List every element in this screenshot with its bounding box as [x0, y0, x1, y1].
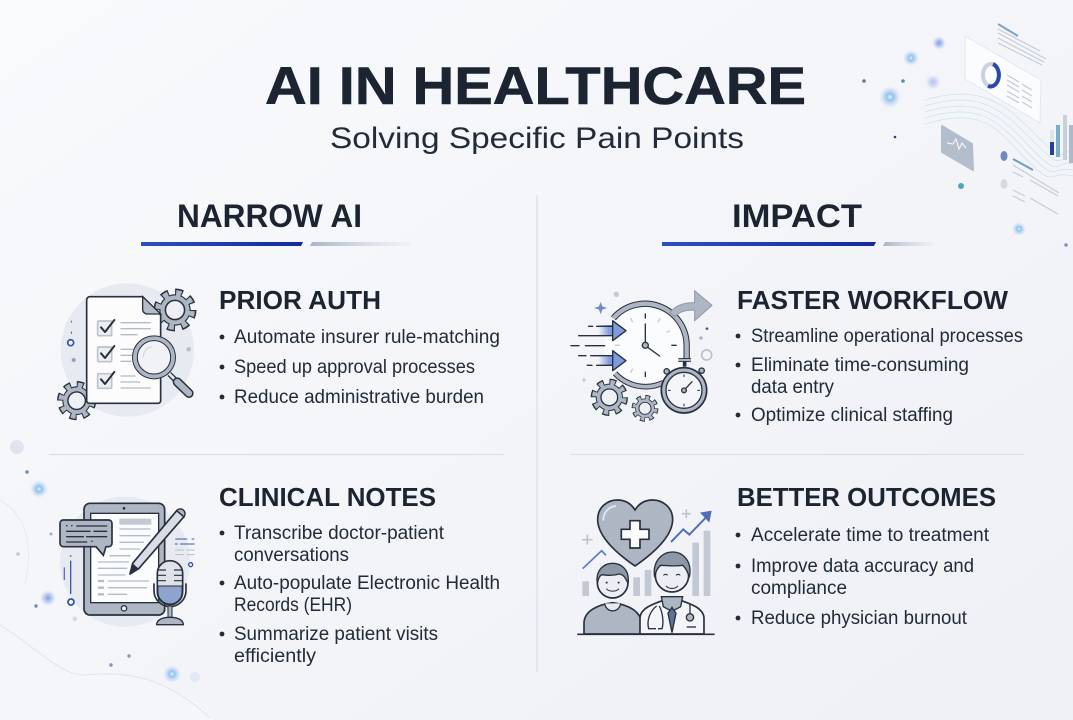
- list: better outcomes: Accelerate time to treatment: [751, 525, 990, 546]
- right divider: [570, 454, 1024, 456]
- list: prior auth: Reduce administrative burden: [234, 387, 484, 408]
- list: clinical notes: Summarize patient visits: [234, 624, 438, 645]
- bar set: [1050, 115, 1073, 163]
- panel: faster workflow: [571, 285, 1023, 426]
- list: prior auth: Automate insurer rule-matching: [234, 327, 500, 348]
- panel: prior auth: [61, 283, 500, 417]
- panel: clinical notes: [60, 482, 500, 667]
- decorative wave and dots: bottom left: [0, 440, 215, 720]
- heading: prior auth: PRIOR AUTH: [219, 285, 381, 315]
- list: clinical notes: conversations: [234, 545, 349, 566]
- list: clinical notes: efficiently: [234, 646, 317, 667]
- decorative network: top right: [862, 24, 1073, 247]
- data lines bottom: [1000, 151, 1059, 214]
- column divider: [536, 195, 538, 672]
- list: prior auth: [220, 327, 500, 408]
- wave lines: [925, 94, 1073, 177]
- panel: better outcomes: [577, 482, 996, 634]
- list: faster workflow: Eliminate time-consuming: [751, 355, 969, 376]
- icon: checklist with magnifier: [61, 283, 194, 417]
- heading: Narrow AI: [141, 198, 411, 246]
- icon: heart, patient, doctor and rising chart: [577, 500, 715, 634]
- heading: clinical notes: CLINICAL NOTES: [219, 482, 436, 512]
- heading: Narrow AI: NARROW AI: [177, 198, 362, 234]
- pulse card: [942, 126, 973, 170]
- subtitle: Solving Specific Pain Points: [330, 122, 744, 155]
- list: faster workflow: Optimize clinical staffing: [751, 405, 953, 426]
- heading: faster workflow: FASTER WORKFLOW: [737, 285, 1008, 315]
- list: better outcomes: compliance: [751, 578, 847, 599]
- glow dots: [879, 86, 901, 108]
- heading: Impact: IMPACT: [732, 198, 862, 234]
- list: faster workflow: [736, 326, 1023, 426]
- list: better outcomes: Improve data accuracy and: [751, 556, 974, 577]
- list: clinical notes: Auto-populate Electronic Health: [234, 573, 500, 594]
- list: better outcomes: Reduce physician burnout: [751, 608, 968, 629]
- data lines top: [998, 24, 1046, 65]
- left divider: [49, 454, 504, 456]
- list: clinical notes: [220, 523, 500, 667]
- heading: better outcomes: BETTER OUTCOMES: [737, 482, 996, 512]
- list: clinical notes: Records (EHR): [234, 595, 352, 616]
- list: prior auth: Speed up approval processes: [234, 357, 475, 378]
- icon: clock, arrows, stopwatch and gears: [571, 291, 712, 419]
- list: faster workflow: data entry: [751, 377, 834, 398]
- list: clinical notes: Transcribe doctor-patient: [234, 523, 445, 544]
- title: AI IN HEALTHCARE: [265, 57, 806, 116]
- heading: Impact: [662, 198, 933, 246]
- list: better outcomes: [736, 525, 990, 629]
- list: faster workflow: Streamline operational processes: [751, 326, 1023, 347]
- dashboard card: [965, 36, 1041, 123]
- icon: tablet, pen and microphone: [60, 497, 195, 627]
